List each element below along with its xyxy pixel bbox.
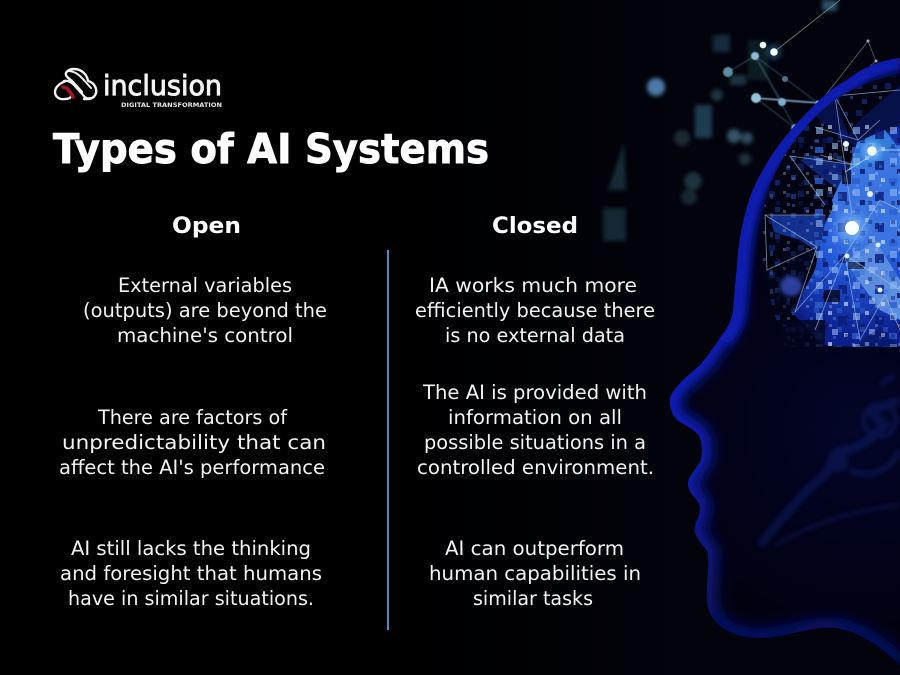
text block: controlled environment: possible situations in a [424, 431, 646, 454]
text block: controlled environment [417, 381, 654, 479]
text block: efficiency: IA works much more [429, 274, 637, 297]
logo tagline: DIGITAL TRANSFORMATION [121, 101, 222, 109]
text block: efficiency: is no external data [445, 324, 625, 347]
text block: external variables: External variables [118, 274, 292, 297]
logo wordmark: inclusion [103, 70, 222, 102]
text block: lacks foresight: AI still lacks the thinking [71, 537, 311, 560]
head illustration [603, 0, 900, 670]
brain edge lines [765, 90, 900, 340]
text block: outperform humans: AI can outperform [445, 537, 624, 560]
text block: outperform humans: human capabilities in [429, 562, 641, 585]
text block: controlled environment: controlled environment. [417, 456, 654, 479]
panel: open systems [59, 213, 327, 610]
text block: external variables [83, 274, 327, 347]
dark gaps in brain [765, 170, 900, 350]
digital brain [755, 70, 900, 355]
logo: inclusion digital transformation [55, 69, 222, 109]
text block: outperform humans [429, 537, 641, 610]
text block: outperform humans: similar tasks [473, 587, 593, 610]
text block: unpredictability: affect the AI's performance [59, 456, 325, 479]
text block: external variables: machine's control [117, 324, 293, 347]
logo icon [55, 69, 96, 99]
glowing brain nodes [837, 141, 882, 292]
text block: lacks foresight: and foresight that humans [60, 562, 322, 585]
column divider [387, 250, 389, 630]
neural network lines above head [723, 0, 878, 132]
head silhouette with blue rim [660, 50, 900, 670]
text block: unpredictability [59, 406, 326, 479]
text block: lacks foresight [60, 537, 322, 610]
glowing facets [770, 85, 900, 347]
text block: efficiency: efficiently because there [415, 299, 655, 322]
text block: lacks foresight: have in similar situations. [68, 587, 314, 610]
text block: unpredictability: unpredictability that can [62, 431, 326, 454]
title: Types of AI Systems [53, 125, 489, 173]
blurred blue cloud [780, 276, 802, 296]
heading: open: Open [172, 213, 241, 239]
text block: unpredictability: There are factors of [97, 406, 288, 429]
smoke inside head [760, 375, 900, 545]
heading: closed: Closed [492, 213, 578, 239]
panel: closed systems [415, 213, 655, 610]
text block: controlled environment: The AI is provided with [422, 381, 647, 404]
text block: external variables: (outputs) are beyond the [83, 299, 327, 322]
blurred data particles [603, 0, 837, 241]
text block: controlled environment: information on all [448, 406, 622, 429]
text block: efficiency [415, 274, 655, 347]
